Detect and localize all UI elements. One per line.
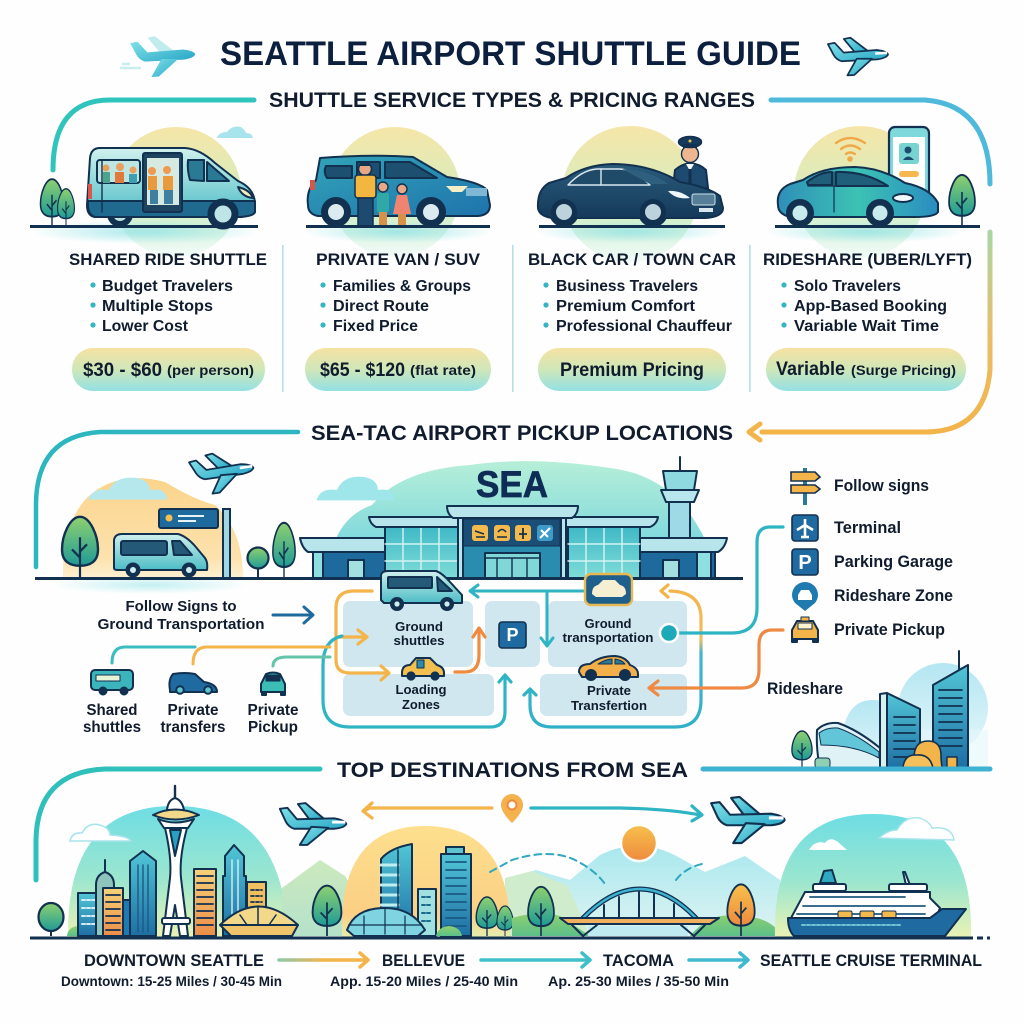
label: private transfers: Private	[168, 702, 219, 719]
price pill: (flat rate)	[410, 362, 476, 378]
label: bellevue: BELLEVUE	[382, 951, 465, 970]
bullets: Premium Comfort	[556, 298, 696, 315]
ground glow	[303, 221, 493, 243]
water	[588, 926, 688, 936]
route to parking	[455, 628, 485, 672]
connectors to service icons	[112, 647, 330, 666]
tree	[792, 731, 812, 767]
center hall	[447, 506, 578, 578]
connector to pickup	[749, 232, 990, 440]
sun	[330, 127, 460, 257]
connector: pickup legend	[649, 630, 783, 695]
top routes	[470, 585, 584, 646]
connector right	[771, 100, 990, 184]
icon: pickup car	[261, 672, 285, 695]
panel: tacoma	[512, 825, 782, 936]
icon: wifi	[836, 138, 865, 161]
bullets: Budget Travelers	[102, 278, 233, 295]
zone: loading	[343, 674, 494, 716]
connector right	[703, 766, 990, 772]
blob	[328, 461, 712, 578]
connector left	[36, 432, 298, 567]
price pill: Variable	[776, 359, 845, 380]
curved building	[815, 723, 880, 768]
label: SEA: SEA	[476, 464, 548, 505]
cloud	[70, 824, 131, 841]
connector left	[36, 769, 320, 880]
icon: shuttle on route	[381, 571, 462, 610]
sun	[111, 127, 241, 257]
legend label: Terminal	[834, 519, 901, 537]
distance: bellevue: App. 15-20 Miles / 25-40 Min	[330, 973, 518, 989]
destination labels	[61, 951, 982, 989]
mid tower	[880, 693, 920, 768]
left wing	[300, 538, 385, 578]
title banner	[120, 34, 889, 78]
ground	[30, 936, 990, 940]
ground	[306, 225, 490, 228]
icon: van	[114, 534, 207, 576]
circle	[68, 806, 282, 937]
ground	[539, 225, 725, 228]
card heading: PRIVATE VAN / SUV	[316, 250, 481, 269]
trees	[313, 886, 513, 936]
bridge	[560, 889, 719, 936]
price pill	[72, 348, 265, 391]
circle	[775, 814, 971, 937]
dot marker	[660, 624, 678, 642]
icon: parking: P	[798, 552, 812, 574]
bullets: Fixed Price	[333, 318, 418, 335]
bullets: Direct Route	[333, 298, 429, 315]
label: private pickup: Pickup	[248, 719, 298, 736]
icon: pin	[501, 794, 523, 823]
zone labels	[394, 616, 654, 713]
bullets	[543, 278, 732, 335]
icon: signpost	[791, 468, 820, 505]
ground	[35, 577, 743, 580]
glass halls	[369, 517, 658, 578]
bullets	[320, 278, 471, 335]
panel: shared ride shuttle	[30, 127, 267, 391]
icon: plane left	[280, 803, 346, 845]
control tower	[661, 457, 699, 542]
section: pickup locations	[35, 422, 988, 768]
legend label: Rideshare Zone	[834, 587, 953, 605]
legend label: Private Pickup	[834, 621, 945, 639]
divider	[512, 245, 514, 392]
card heading: RIDESHARE (UBER/LYFT)	[763, 250, 972, 269]
zone: ground shuttles	[343, 601, 473, 667]
heading: service types: SHUTTLE SERVICE TYPES & PRICING RANGES	[269, 89, 755, 112]
bush	[436, 926, 462, 936]
small trees	[248, 523, 295, 578]
zone: parking	[485, 601, 540, 667]
sun	[562, 126, 698, 262]
cloud	[89, 478, 167, 500]
callout: follow signs: Ground Transportation	[98, 616, 264, 633]
icon: taxi	[792, 617, 818, 642]
panel: rideshare	[763, 126, 980, 391]
buildings left	[78, 851, 156, 936]
scene: curbside	[50, 448, 295, 594]
tower curved	[381, 844, 412, 936]
icon: small yellow car	[402, 658, 444, 680]
icon: family	[355, 162, 411, 226]
panel: downtown seattle	[38, 786, 298, 937]
price pill	[538, 348, 726, 391]
zone labels: Zones	[402, 697, 440, 712]
card heading: BLACK CAR / TOWN CAR	[528, 250, 736, 269]
orange blob	[63, 478, 243, 578]
price pill	[305, 348, 491, 391]
icon: plane right	[828, 36, 889, 76]
bullets: Business Travelers	[556, 278, 698, 295]
callout: follow signs	[98, 598, 313, 633]
icon: chauffeur	[673, 136, 708, 188]
route arrows top	[363, 803, 702, 821]
zone labels: transportation	[562, 630, 654, 645]
section: destinations	[30, 759, 990, 989]
heading: pickup: SEA-TAC AIRPORT PICKUP LOCATIONS	[311, 422, 733, 445]
trees	[40, 179, 74, 226]
zone: private transfer	[540, 674, 687, 716]
panel: cruise terminal	[775, 814, 971, 937]
ground glow	[535, 221, 725, 243]
icon: orange car	[579, 656, 638, 680]
label: tacoma: TACOMA	[603, 951, 674, 970]
divider	[749, 245, 751, 392]
arrow: to bellevue	[279, 953, 368, 967]
price pill: Premium Pricing	[560, 360, 704, 381]
small block	[418, 889, 436, 936]
connector left	[53, 100, 254, 170]
ground glow	[50, 576, 250, 594]
glass dome	[347, 908, 425, 936]
icon: parking	[792, 549, 818, 575]
icon: cruise ship	[788, 870, 966, 936]
bullets	[781, 278, 947, 335]
connector: terminal legend	[672, 527, 783, 633]
bullets: Solo Travelers	[794, 278, 901, 295]
icon: black car	[538, 164, 723, 226]
legend	[791, 468, 953, 642]
price pill	[766, 348, 966, 391]
label: shared shuttles: shuttles	[83, 719, 141, 736]
title: SEATTLE AIRPORT SHUTTLE GUIDE	[220, 35, 801, 73]
zone labels: Transfertion	[571, 698, 647, 713]
label: private pickup: Private	[248, 702, 299, 719]
icon: P box: P	[506, 625, 519, 645]
stadium	[220, 906, 298, 936]
tower right	[441, 847, 471, 936]
bullets: Variable Wait Time	[794, 318, 939, 335]
dashed route arcs	[490, 854, 702, 884]
scene backdrop mountains	[270, 846, 780, 936]
section: shuttle service types	[30, 89, 990, 440]
hills	[512, 913, 782, 936]
distance: tacoma: Ap. 25-30 Miles / 35-50 Min	[548, 973, 729, 989]
ground	[775, 225, 980, 228]
legend label: Parking Garage	[834, 553, 953, 571]
bullets: Lower Cost	[102, 318, 189, 335]
ground glow	[765, 221, 965, 243]
tall tower	[933, 651, 968, 768]
illustration: city	[792, 651, 988, 768]
golden shrubs	[903, 741, 942, 768]
right loop	[524, 585, 701, 727]
price pill: (Surge Pricing)	[851, 362, 956, 378]
zone labels: shuttles	[394, 633, 444, 648]
sun	[794, 126, 926, 258]
clouds	[809, 818, 954, 850]
cloud	[217, 127, 253, 138]
buildings right	[194, 845, 266, 936]
distance: downtown: Downtown: 15-25 Miles / 30-45 Min	[61, 973, 282, 989]
flow diagram	[323, 571, 701, 727]
ground glow	[30, 220, 260, 244]
zone: ground transportation	[548, 601, 687, 667]
icon: tree	[949, 175, 975, 226]
bush	[67, 926, 90, 936]
teal route loop	[323, 636, 511, 727]
legend label: Follow signs	[834, 477, 929, 495]
icon: rideshare pin	[792, 582, 818, 611]
label: private transfers: transfers	[160, 719, 226, 736]
price pill: $30 - $60	[83, 360, 162, 381]
label: downtown seattle: DOWNTOWN SEATTLE	[84, 951, 264, 970]
zone labels: Ground	[584, 616, 632, 631]
terminal signs	[472, 525, 553, 541]
panel: black car	[528, 126, 736, 391]
label: shared shuttles	[83, 702, 141, 736]
panel: private van / suv	[303, 127, 493, 391]
label: shared shuttles: Shared	[86, 702, 138, 719]
icon: direction sign	[159, 509, 230, 578]
backdrop	[840, 663, 988, 768]
tree	[62, 517, 98, 578]
icon: plane	[188, 448, 256, 496]
bullets: Multiple Stops	[102, 298, 213, 315]
circle	[342, 826, 510, 937]
tree	[38, 903, 64, 936]
heading: destinations: TOP DESTINATIONS FROM SEA	[337, 759, 688, 782]
label: cruise terminal: SEATTLE CRUISE TERMINAL	[760, 951, 982, 970]
icon: private car	[169, 673, 217, 694]
bullets	[90, 278, 233, 335]
arrow: to tacoma	[481, 953, 590, 967]
zone labels: Loading	[396, 682, 447, 697]
icon: shared shuttle	[91, 670, 133, 694]
ground	[30, 225, 258, 228]
right wing	[640, 538, 727, 578]
sun	[621, 825, 657, 861]
bullets: Families & Groups	[333, 278, 471, 295]
cloud	[317, 477, 395, 500]
icon: plane left	[120, 34, 196, 78]
icon: car chip	[585, 574, 632, 605]
arrow: to cruise terminal	[689, 953, 748, 967]
bullets: App-Based Booking	[794, 298, 947, 315]
icon: suv	[308, 156, 490, 226]
callout: follow signs: Follow Signs to	[126, 598, 236, 615]
orange routes left	[336, 591, 389, 680]
icon: rideshare car	[778, 167, 938, 226]
card heading: SHARED RIDE SHUTTLE	[69, 250, 267, 269]
price pill: (per person)	[167, 362, 254, 378]
trees	[528, 884, 755, 936]
zone labels: Private	[587, 683, 631, 698]
panel: bellevue	[313, 826, 702, 937]
icon: P box	[499, 622, 526, 648]
icon: plane right	[711, 797, 785, 843]
label: private transfers	[160, 702, 226, 736]
label: private pickup	[248, 702, 299, 736]
price pill: $65 - $120	[320, 360, 405, 381]
space needle	[153, 786, 199, 936]
label: rideshare: Rideshare	[767, 680, 843, 698]
terminal building	[300, 457, 727, 578]
icon: shuttle van	[87, 148, 255, 228]
icon: terminal	[792, 515, 818, 541]
zone labels: Ground	[395, 619, 443, 634]
icon: phone	[889, 127, 929, 207]
bullets: Professional Chauffeur	[556, 318, 732, 335]
divider	[282, 245, 284, 392]
